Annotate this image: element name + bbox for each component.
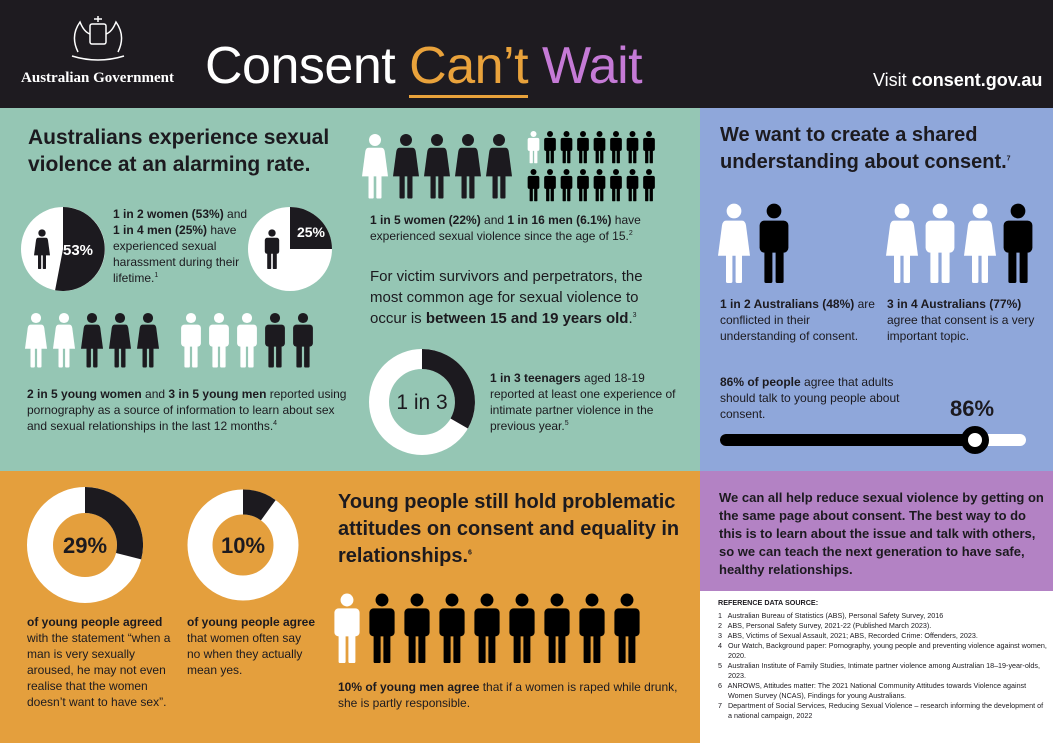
pie chart: men 25% [248,207,332,291]
title: Consent Can’t Wait [205,37,642,95]
heading: We want to create a shared understanding about consent.7 [720,124,1011,173]
text: common age: For victim survivors and perpetrators, the most common age for sexual violence to occur is between 15 and 19 years old.3 [370,268,643,327]
pie chart: women 53% [21,207,105,291]
references: 6 ANROWS, Attitudes matter: The 2021 National Community Attitudes towards Violence against Women Survey (NCAS), Findings for young Australians. [718,681,1026,700]
donut: 29%: 29% [63,533,107,558]
text: harassment: 1 in 2 women (53%) and 1 in 4 men (25%) have experienced sexual harassment during their lifetime.1 [113,207,247,285]
heading: Young people still hold problematic attitudes on consent and equality in relationships.6 [338,491,679,567]
icons: 1 in 16 men [528,131,655,202]
icons: 1 in 2 [718,204,788,283]
slider chart: 86%: 86% [950,396,994,421]
icons: 10% young men [334,594,640,663]
donut: 10%: 10% [221,533,265,558]
text: raped while drunk: 10% of young men agree that if a women is raped while drunk, she is partly responsible. [338,680,677,710]
references: 1 Australian Bureau of Statistics (ABS), Personal Safety Survey, 2016 [718,611,943,620]
slider chart: 86% [720,396,1026,454]
text: important topic: 3 in 4 Australians (77%) agree that consent is a very important topic. [887,297,1034,343]
text: 29% statement: of young people agreed with the statement “when a man is very sexually aroused, he may not even realise that the women doesn’t want to have sex”. [27,615,170,709]
references: 7 Department of Social Services, Reducing Sexual Violence – research informing the development of a national campaign, 2022 [718,701,1043,720]
donut: 10% [188,490,298,600]
references: 5 Australian Institute of Family Studies, Intimate partner violence among Australian 18–19-year-olds, 2023. [718,661,1040,680]
text: 10% statement: of young people agree that women often say no when they actually mean yes. [187,615,315,677]
references: 3 ABS, Victims of Sexual Assault, 2021; ABS, Recorded Crime: Offenders, 2023. [718,631,978,640]
logo: Australian Government [21,16,174,86]
references: 2 ABS, Personal Safety Survey, 2021-22 (Published March 2023). [718,621,931,630]
text: pornography: 2 in 5 young women and 3 in 5 young men reported using pornography as a source of information to learn about sex and sexual relationships in the last 12 months.4 [27,387,346,433]
panel: shared understanding (blue) [700,108,1053,471]
header [0,0,1053,108]
donut: 29% [27,487,143,603]
references: REFERENCE DATA SOURCE: [718,598,818,607]
panel: call to action (purple) [700,471,1053,591]
text: conflicted: 1 in 2 Australians (48%) are conflicted in their understanding of consent. [720,297,875,343]
text: call to action: We can all help reduce sexual violence by getting on the same page about consent. The best way to do this is to learn about the issue and talk with others, so we can teach the next generation to have safe, healthy relationships. [719,490,1044,577]
references: 4 Our Watch, Background paper: Pornography, young people and preventing violence against women, 2020. [718,641,1047,660]
panel: attitudes (orange) [0,471,700,743]
text: 86%: 86% of people agree that adults should talk to young people about consent. [720,375,899,421]
pie chart: men 25%: 25% [297,224,326,240]
icons: young women and men [25,313,313,368]
text: teenagers: 1 in 3 teenagers aged 18-19 reported at least one experience of intimate partner violence in the previous year.5 [490,371,675,433]
icons: 1 in 5 women [362,134,512,198]
logo: Australian Government: Australian Government [21,70,174,86]
donut: 1 in 3 [369,349,475,455]
references [718,598,1047,720]
icons: 3 in 4 [886,204,1032,283]
donut: 1 in 3: 1 in 3 [396,391,448,414]
pie chart: women 53%: 53% [63,242,93,259]
panel: prevalence (teal) [0,108,700,471]
text: since age 15: 1 in 5 women (22%) and 1 in 16 men (6.1%) have experienced sexual violence since the age of 15.2 [370,213,641,243]
website link: Visit consent.gov.au [873,70,1042,90]
heading: Australians experience sexual violence at an alarming rate. [28,126,329,176]
